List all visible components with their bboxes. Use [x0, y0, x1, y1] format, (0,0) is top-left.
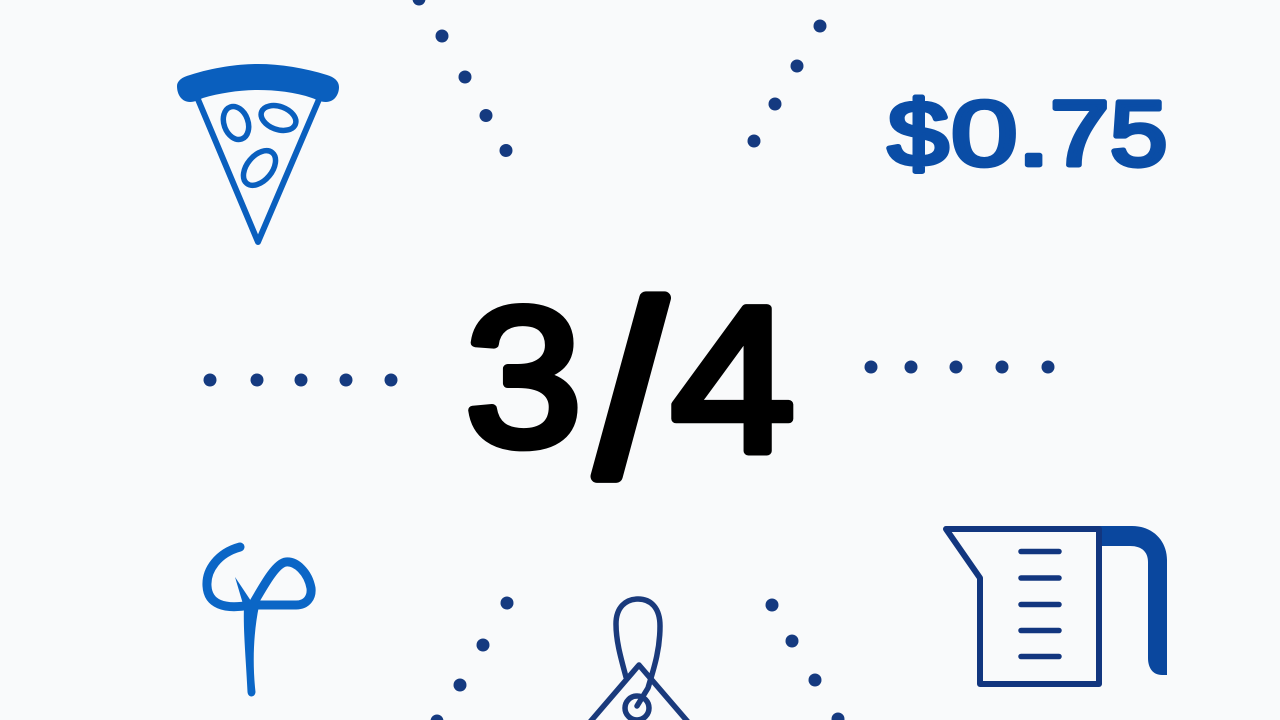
price label: 7: [1050, 83, 1109, 185]
dotted line: bottom left: [430, 596, 514, 720]
fraction label: 4: [671, 264, 795, 495]
fraction label: 3: [465, 267, 582, 487]
fraction label: /: [597, 255, 665, 526]
price label: .: [1017, 81, 1050, 185]
dotted line: bottom right: [766, 598, 844, 720]
icon: pizza slice: [177, 64, 339, 242]
dotted line: left: [204, 374, 398, 386]
price label: [888, 81, 1167, 185]
icon: price tag: [590, 599, 688, 720]
price label: 5: [1110, 82, 1167, 185]
price label: 0: [951, 81, 1018, 185]
fraction label: [465, 255, 795, 526]
icon: sprout: [207, 547, 311, 696]
dotted line: top right: [748, 20, 826, 148]
dotted line: top left: [412, 0, 512, 157]
price label: $: [888, 83, 948, 185]
dotted line: right: [864, 360, 1054, 374]
icon: measuring jug: [946, 526, 1167, 684]
